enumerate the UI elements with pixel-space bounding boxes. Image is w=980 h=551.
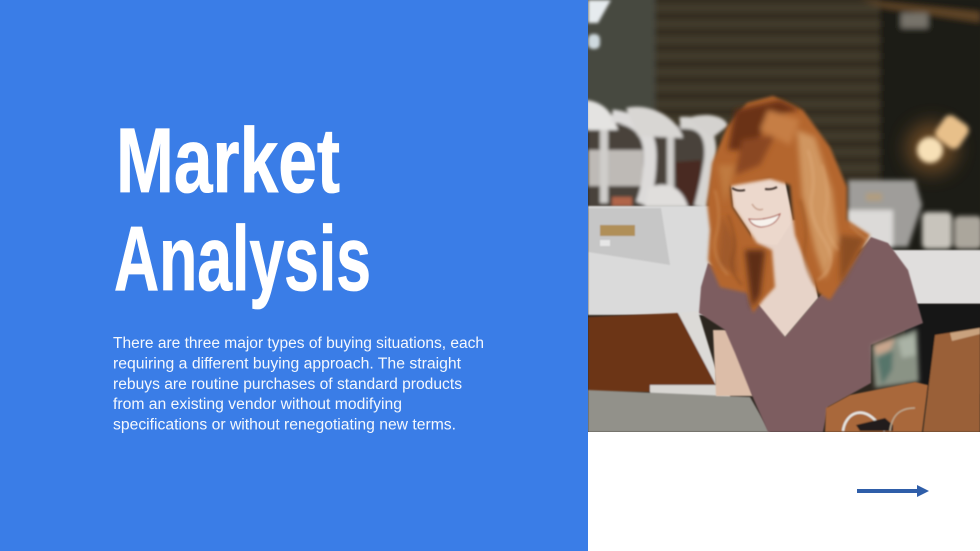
photo: woman smiling at a laptop in a cafe bbox=[580, 0, 980, 432]
facial features bbox=[732, 187, 780, 227]
face bbox=[730, 177, 794, 235]
leather bag bbox=[825, 382, 928, 432]
title: Market bbox=[116, 110, 340, 212]
text block: description: from an existing vendor without modifying bbox=[113, 396, 402, 413]
laptop bbox=[588, 390, 770, 432]
hair shading bbox=[718, 100, 865, 308]
cafe back wall bbox=[580, 0, 980, 255]
shirt bbox=[699, 237, 923, 432]
text block: description bbox=[113, 335, 484, 434]
title: Analysis bbox=[114, 208, 371, 310]
arm tattoo bbox=[872, 329, 919, 388]
arm: left bbox=[713, 330, 753, 396]
lights bbox=[906, 113, 971, 174]
title bbox=[114, 110, 371, 310]
sofa and wooden furniture bbox=[588, 304, 980, 432]
text block: description: There are three major types of buying situations, each bbox=[113, 335, 484, 352]
text block: description: requiring a different buying approach. The straight bbox=[113, 356, 462, 372]
text block: description: specifications or without renegotiating new terms. bbox=[113, 416, 456, 434]
chest and neck bbox=[750, 220, 818, 337]
white chairs bbox=[586, 100, 728, 210]
hair strands bbox=[714, 150, 868, 285]
hair bbox=[707, 96, 870, 313]
arrow bbox=[857, 485, 929, 497]
bar with woven panel bbox=[588, 206, 728, 315]
text block: description: rebuys are routine purchases of standard products bbox=[113, 376, 462, 393]
panel: blue text panel bbox=[0, 0, 588, 551]
counter objects on the right bbox=[847, 180, 980, 249]
